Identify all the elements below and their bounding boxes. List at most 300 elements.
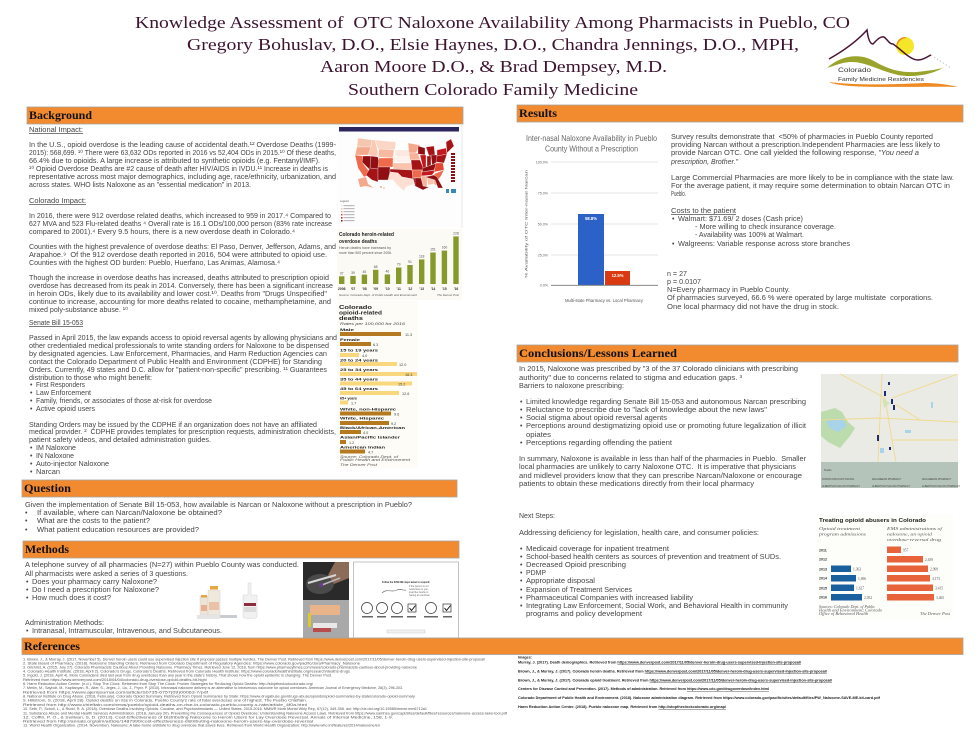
panel: question xyxy=(22,480,457,534)
chart: Colorado heroin-related overdose deaths: more than 500 percent since 2006. xyxy=(339,251,392,255)
chart: Colorado opioid-related deaths: 15 to 19 years xyxy=(340,348,378,352)
text block: reference list: 12. Coffin, P. O., & Sullivan, S. D. (2013). Cost-Effectiveness of Distributing Naloxone to Heroin Users for Lay Overdose Reversal. Annals of Internal Medicine, 158, 1-9. xyxy=(23,716,393,720)
chart: intra-nasal naloxone availability bar chart: 25.0% xyxy=(538,254,549,258)
text block: study question xyxy=(25,502,412,534)
text block: image references: Murray, J. (2017). Death demographics. Retrieved from https://www.denverpost.com/2017/11/05/denver-heroin-drug-users-supervised-injection-site-proposal/ xyxy=(518,660,801,664)
chart: Colorado opioid-related deaths: 12.6 xyxy=(402,392,409,396)
text block: Colorado impact: continue to increase, accounting for more deaths related to cocaine, methamphetamine, and xyxy=(29,299,331,306)
text block: next steps: programs and policy development xyxy=(526,611,642,618)
heading: Results: Results xyxy=(519,106,557,120)
chart: intra-nasal naloxone availability bar chart: 50.0% xyxy=(538,222,549,226)
text block: study question: What are the costs to the patient? xyxy=(37,518,150,525)
image: Pueblo naloxone map: ALBERTSON SAV-ON PHARMACY xyxy=(872,485,911,488)
text block: survey results: Survey results demonstrate that <50% of pharmacies in Pueblo County reported xyxy=(671,134,933,141)
chart: Colorado opioid-related deaths: 65+ years xyxy=(340,396,357,400)
image: naloxone syringe in hand xyxy=(303,562,349,600)
text block: next steps: Pharmaceutical Companies with increased liability xyxy=(526,595,694,602)
chart: Colorado heroin-related overdose deaths: 45 xyxy=(363,270,366,274)
title block: Aaron Moore D.O., & Brad Dempsey, M.D. xyxy=(320,57,667,76)
text block: Senate Bill 15-053: • xyxy=(30,445,33,452)
text block: national impact: representative across most major demographics, including age, race/ethnicity, urbanization, and xyxy=(29,174,336,181)
chart: Colorado heroin-related overdose deaths: '08 xyxy=(362,287,367,291)
text block: costs to the patient: Walmart: $71.69/ 2 doses (Cash price) xyxy=(678,216,803,223)
text block: barriers to prescribing: Reluctance to prescribe due to "lack of knowledge about the new laws" xyxy=(526,407,768,414)
text block: survey results: providing Narcan without a prescription.Independent Pharmacies are less likely to xyxy=(671,142,940,149)
text block: sample statistics: N=Every pharmacy in Pueblo County. xyxy=(667,287,790,294)
text block: reference list: 13. World Health Organization. (2014, November). Naloxone: A take-home antidote to drug overdose that saves lives. Retrieved from World Health Organization: http://www.who.int/features/2014/naloxone/en xyxy=(23,724,380,728)
text block: study question: What patient education resources are provided? xyxy=(37,527,199,534)
heading: References: References xyxy=(24,639,80,653)
chart: treating opioid abusers in Colorado: Sources: Colorado Dept. of Public xyxy=(819,605,875,609)
diagram: SAVE ME steps: If the person is not xyxy=(409,585,429,588)
chart: Colorado heroin-related overdose deaths: '11 xyxy=(397,287,401,291)
text block: reference list: 8. National Institute on Drug Abuse. (2018, February). Colorado Opioid Summary. Retrieved from Opioid Summaries by State: https://www.drugabuse.gov/drugs-abuse/opioids/opioid-summaries-by-state/colorado-opioid-summary xyxy=(23,694,415,698)
text block: reference list: 9. Hillstrom, S. (2018, April 28). Opioid deaths on rise in Colorado, Pueblo County's rate of fatal overdoses one of highest. The Pueblo Chieftain. xyxy=(23,698,307,702)
text block: next steps: Expansion of Treatment Services xyxy=(526,587,633,594)
text block: Senate Bill 15-053: • xyxy=(30,390,33,397)
logo: Colorado Family Medicine Residencies: Colorado xyxy=(838,68,872,74)
text block: national impact: 2015): 568,699. ¹⁰ There were 63,632 ODs reported in 2016 vs 52,404 ODs in 2015.¹⁰ Of these deaths, xyxy=(29,149,336,157)
text block: study question: If available, where can Narcan/Naloxone be obtained? xyxy=(37,510,222,517)
text block: image references: Brown, J., & Murray, J. (2017). Colorado heroin deaths. Retrieved from https://www.denverpost.com/2017/11/05/denver-heroin-drug-users-supervised-injection-site-proposal/ xyxy=(518,670,827,674)
text block: Senate Bill 15-053: Passed in April 2015, the law expands access to opioid reversal agents by allowing physicians and xyxy=(29,335,337,342)
text block: Senate Bill 15-053: Active opioid users xyxy=(36,406,95,413)
image: Pueblo naloxone map xyxy=(821,374,961,488)
text block: image references: Centers for Disease Control and Prevention. (2017). Methods of administration. Retrieved from https://www.cdc.gov/drugoverdose/index.html xyxy=(518,687,769,691)
text block: costs to the patient: Walgreens: Variable response across store branches xyxy=(678,241,851,248)
text block: national impact: In the U.S., opioid overdose is the leading cause of accidental death.¹² Overdose Deaths (1999- xyxy=(29,142,337,149)
text block: barriers to prescribing: • xyxy=(520,440,523,447)
chart: treating opioid abusers in Colorado: 1,627 xyxy=(856,586,864,592)
text block: Senate Bill 15-053: patient safety videos, and detailed administration guides. xyxy=(29,437,211,444)
heading: Methods: Methods xyxy=(25,542,69,556)
heading: Conclusions/Lessons Learned: Conclusions/Lessons Learned xyxy=(519,346,677,360)
chart: treating opioid abusers in Colorado: 3,465 xyxy=(936,596,944,601)
chart: Colorado heroin-related overdose deaths: overdose deaths xyxy=(339,239,377,245)
chart: treating opioid abusers in Colorado: 3,173 xyxy=(932,577,940,582)
text block: reference list: 4. Colorado Health Institute. (2018, April 2). Colorado's Drugs. Colorado's Deaths. Retrieved from Colorado Health Institute: https://www.coloradohealthinstitute.org/research/deaths-drugs xyxy=(23,670,350,674)
text block: Colorado impact: in heroin ODs, likely due to its availability and lower cost.¹⁰. Deaths from "Drugs Unspecified" xyxy=(29,290,328,298)
text block: barriers to prescribing: In 2015, Naloxone was prescribed by "3 of the 37 Colorado clinicians with prescribing xyxy=(519,366,798,373)
chart: treating opioid abusers in Colorado xyxy=(817,515,953,620)
chart: treating opioid abusers in Colorado: 2,052 xyxy=(864,596,872,601)
text block: next steps: Appropriate disposal xyxy=(526,578,595,585)
text block: next steps: • xyxy=(520,595,523,602)
chart: Colorado heroin-related overdose deaths xyxy=(337,229,462,300)
text block: Senate Bill 15-053: Family, friends, or associates of those at-risk for overdose xyxy=(36,398,212,405)
chart: Colorado heroin-related overdose deaths: Heroin deaths have increased by xyxy=(339,246,391,250)
chart: Colorado heroin-related overdose deaths: 37 xyxy=(340,272,344,276)
chart: treating opioid abusers in Colorado: 3,415 xyxy=(935,586,943,592)
text block: next steps: • xyxy=(520,587,523,594)
text block: national impact xyxy=(29,127,337,189)
image: naloxone kit xyxy=(303,600,349,638)
heading: Question: Question xyxy=(24,481,71,495)
text block: Senate Bill 15-053: by designated agencies. Law Enforcement, Pharmacies, and Harm Reduction Agencies can xyxy=(29,351,327,358)
image: Pueblo naloxone map: Pueblo xyxy=(824,469,832,472)
panel: background xyxy=(27,107,463,476)
chart: treating opioid abusers in Colorado: EMS administrations of xyxy=(885,527,944,531)
chart: Colorado heroin-related overdose deaths: 118 xyxy=(419,254,425,258)
text block: reference list: Retrieved from https://www.ajemjournal.com/article/S0735-6757(09)00063-7/pdf xyxy=(23,690,209,694)
text block: Senate Bill 15-053: Law Enforcement xyxy=(36,390,91,397)
chart: treating opioid abusers in Colorado: 2016 xyxy=(819,596,827,600)
image: Pueblo naloxone map: WALGREENS PHARMACY xyxy=(872,478,902,481)
text block: next steps: Next Steps: xyxy=(519,513,555,520)
text block: Senate Bill 15-053: Senate Bill 15-053 xyxy=(29,320,83,327)
text block: Senate Bill 15-053: Auto-injector Naloxone xyxy=(36,461,109,468)
text block: next steps: Integrating Law Enforcement, Social Work, and Behavioral Health in community xyxy=(526,603,789,610)
text block: Colorado impact: 627 MVA and 523 Flu-related deaths ⁴ Overall rate is 16.1 ODs/100,000 person (83% rate increase xyxy=(29,221,332,228)
text block: survey methods: Does your pharmacy carry Naloxone? xyxy=(32,579,157,586)
text block: Senate Bill 15-053: other credentialed medical professionals to write standing orders for Naloxone to be dispensed xyxy=(29,343,329,350)
chart: Colorado opioid-related deaths: 1.7 xyxy=(351,402,356,406)
chart: treating opioid abusers in Colorado: program admissions xyxy=(817,532,867,536)
text block: study question: Given the implementation of Senate Bill 15-053, how available is Narcan or Naloxone without a prescription in Pueblo? xyxy=(25,502,412,509)
text block: study question: • xyxy=(25,518,28,525)
chart: Colorado heroin-related overdose deaths: '15 xyxy=(442,287,447,291)
text block: reference list: 10. Seth, P., Scholl, L., & Rudd, R. A. (2018). Overdose Deaths Involving Opioids, Cocaine, and Psychostimulants — United States, 2015-2016. MMWR Morb Mortal Wkly Rep, 67(12), 349-358. doi: http://dx.doi.org/10.15585/mmwr.mm6712a1 xyxy=(23,707,427,711)
chart: Colorado opioid-related deaths: Source: Colorado Dept. of xyxy=(340,455,400,459)
heading: Results xyxy=(517,105,963,122)
text block: image references: Colorado Department of Public Health and Environment. (2018). Naloxone administration diagram. Retrieved from https://www.colorado.gov/pacific/sites/default/files/PW_Naloxone-SAVE-ME-kit-card.pdf xyxy=(518,696,881,700)
heading: Background xyxy=(27,107,463,124)
chart: Colorado opioid-related deaths: White, non-Hispanic xyxy=(340,408,396,412)
chart: intra-nasal naloxone availability bar chart xyxy=(524,133,658,303)
chart: Colorado opioid-related deaths: 9.6 xyxy=(394,412,399,416)
text block: sample statistics: p = 0.0107 xyxy=(667,279,701,286)
text block: barriers to prescribing: authority" due to concerns related to stigma and education gaps. ³ xyxy=(519,375,743,382)
text block: Colorado impact: In 2016, there were 912 overdose related deaths, which increased to 959 in 2017.⁴ Compared to xyxy=(29,213,331,220)
text block: Senate Bill 15-053: distribution to those who might benefit: xyxy=(29,375,152,382)
chart: Colorado opioid-related deaths: 25 to 34 years xyxy=(340,368,378,372)
chart: Colorado heroin-related overdose deaths: 91 xyxy=(408,260,412,264)
chart: intra-nasal naloxone availability bar chart: County Without a Prescription xyxy=(545,144,638,154)
text block: sample statistics: One local pharmacy did not have the drug in stock. xyxy=(667,304,839,311)
chart: Colorado heroin-related overdose deaths: 160 xyxy=(442,246,447,250)
text block: national impact: ¹⁰ Opioid Overdose Deaths are #2 cause of death after HIV/AIDS in IVDU.¹¹ Increase in deaths is xyxy=(29,165,328,173)
text block: sample statistics: n = 27 xyxy=(667,271,687,278)
chart: Colorado opioid-related deaths: Asian/Pacific Islander xyxy=(340,436,401,440)
diagram: SAVE ME steps: treat like he/she is xyxy=(409,591,429,594)
text block: Senate Bill 15-053: • xyxy=(30,398,33,405)
image: naloxone vials and nasal device xyxy=(197,583,257,619)
chart: US overdose death rate map: Legend xyxy=(340,199,349,203)
text block: Colorado impact: Though the increase in overdose deaths has increased, deaths attributed to prescription opioid xyxy=(29,275,329,282)
chart: Colorado opioid-related deaths: The Denver Post xyxy=(340,463,377,467)
text block: survey methods: A telephone survey of all pharmacies (N=27) within Pueblo County was conducted. xyxy=(25,562,299,569)
text block: Senate Bill 15-053: • xyxy=(30,406,33,413)
text block: Senate Bill 15-053: IM Naloxone xyxy=(36,445,76,452)
text block: Colorado impact: Colorado Impact: xyxy=(29,198,86,205)
text block: reference list: Retrieved from http://annals.org/aim/article/1487990/cost-effectiveness-distributing-naloxone-heroin-users-lay-overdose-reversal xyxy=(23,720,313,724)
chart: Colorado heroin-related overdose deaths: '14 xyxy=(431,287,435,291)
chart: Colorado heroin-related overdose deaths: '13 xyxy=(419,287,424,291)
text block: Senate Bill 15-053: Standing Orders may be issued by the CDPHE if an organization does not have an affiliated xyxy=(29,422,317,429)
text block: survey methods: Do I need a prescription for Naloxone? xyxy=(32,587,159,594)
text block: barriers to prescribing: opiates xyxy=(526,432,552,439)
logo: Colorado Family Medicine Residencies xyxy=(827,30,958,87)
chart: Colorado opioid-related deaths: deaths xyxy=(339,316,363,322)
title block: Knowledge Assessment of OTC Naloxone Availability Among Pharmacists in Pueblo, CO xyxy=(135,13,850,32)
title block: Gregory Bohuslav, D.O., Elsie Haynes, D.O., Chandra Jennings, D.O., MPH, xyxy=(187,35,799,54)
chart: Colorado heroin-related overdose deaths: 79 xyxy=(397,262,401,266)
text block: summary: and midlevel providers know that they can prescribe Narcan/Naloxone or encourage xyxy=(519,473,802,480)
text block: Senate Bill 15-053: • xyxy=(30,453,33,460)
chart: Colorado heroin-related overdose deaths: '09 xyxy=(373,287,378,291)
chart: Colorado opioid-related deaths: opioid-related xyxy=(339,310,382,316)
chart: Colorado heroin-related overdose deaths: Colorado heroin-related xyxy=(339,232,395,238)
text block: survey methods: Intranasal, Intramuscular, Intravenous, and Subcutaneous. xyxy=(32,628,222,635)
text block: survey methods: • xyxy=(26,628,29,635)
text block: Colorado impact: overdose has decreased from its peak in 2014. Conversely, there has been a significant increase xyxy=(29,283,333,290)
image: Pueblo naloxone map: ALBERTSON SAV-ON PHARMACY xyxy=(822,485,861,488)
chart: Colorado opioid-related deaths: 20 to 24 years xyxy=(340,358,378,362)
panel: conclusions xyxy=(517,345,961,620)
text block: survey results: prescription, Brother." xyxy=(670,159,739,166)
image: Pueblo naloxone map: DOWN'S DISCOUNT DRUGS xyxy=(822,478,854,481)
text block: barriers to prescribing xyxy=(519,366,806,447)
chart: Colorado opioid-related deaths xyxy=(337,301,418,468)
diagram: SAVE ME steps: having an overdose xyxy=(409,594,431,597)
text block: next steps: • xyxy=(520,562,523,569)
text block: survey methods: • xyxy=(26,587,29,594)
text block: survey methods: • xyxy=(26,595,29,602)
chart: Colorado heroin-related overdose deaths: '16 xyxy=(454,287,458,291)
text block: Colorado impact: mixed poly-substance abuse. ¹⁰ xyxy=(29,306,128,314)
text block: survey methods: • xyxy=(26,579,29,586)
chart: Colorado opioid-related deaths: White, Hispanic xyxy=(340,416,384,420)
text block: barriers to prescribing: • xyxy=(520,407,523,414)
text block: reference list: Retrieved from http://www.chieftain.com/news/pueblo/opioid-deaths-on-rise-in-colorado-pueblo-county-s-rate/article_4f0a.html xyxy=(23,703,307,707)
chart: Colorado opioid-related deaths: 6.3 xyxy=(373,343,378,347)
diagram: SAVE ME steps: Follow the SAVE ME steps below to respond: xyxy=(382,580,430,584)
text block: summary: In summary, Naloxone is available in less than half of the pharmacies in Pueblo. Smaller xyxy=(519,456,807,463)
chart: Colorado heroin-related overdose deaths: 68 xyxy=(374,265,378,269)
heading: Background: Background xyxy=(29,108,92,122)
chart: Colorado heroin-related overdose deaths: '07 xyxy=(351,287,355,291)
text block: costs to the patient: • xyxy=(672,241,675,248)
chart: Colorado opioid-related deaths: 16.3 xyxy=(405,373,412,377)
text block: barriers to prescribing: Limited knowledge regarding Senate Bill 15-053 and autonomous Narcan prescribing xyxy=(526,399,806,406)
text block: Colorado impact xyxy=(29,198,336,314)
text block: survey methods xyxy=(25,562,299,635)
chart: Colorado opioid-related deaths: 15.2 xyxy=(398,382,405,386)
text block: Senate Bill 15-053: contact the Colorado Department of Public Health and Environment (CDPHE) for Standing xyxy=(29,359,322,366)
text block: survey methods: All pharmacists were asked a series of 3 questions. xyxy=(25,571,188,578)
text block: national impact: National Impact: xyxy=(29,127,83,134)
chart: intra-nasal naloxone availability bar chart: % Availability of OTC Inter-nasal Narcan xyxy=(524,170,528,278)
text block: image references: Brown, J., & Murray, J. (2017). Colorado opioid treatment. Retrieved from https://www.denverpost.com/2017/11/05/denver-heroin-drug-users-supervised-injection-site-proposal/ xyxy=(518,678,832,682)
chart: Colorado opioid-related deaths: 45 to 64 years xyxy=(340,387,378,391)
chart: Colorado opioid-related deaths: American Indian xyxy=(340,446,386,450)
text block: survey methods: How much does it cost? xyxy=(32,595,111,602)
chart: treating opioid abusers in Colorado: 2,999 xyxy=(930,568,938,572)
text block: summary: patients to obtain these medications directly from their local pharmacy xyxy=(519,481,755,488)
chart: treating opioid abusers in Colorado: Opioid treatment xyxy=(819,527,862,531)
text block: image references xyxy=(518,656,881,709)
text block: costs to the patient: - Availability was 100% at Walmart. xyxy=(695,232,804,239)
heading: Methods xyxy=(23,541,459,558)
chart: US overdose death rate map xyxy=(337,125,462,228)
text block: next steps: • xyxy=(520,570,523,577)
text block: reference list: 5. Ingold, J. (2018, April 4). More Coloradans died last year from drug overdoses than any year in the state's history. That shows how the opioid epidemic is changing. The Denver Post. xyxy=(23,674,332,678)
text block: reference list: Retrieved from https://www.denverpost.com/2018/04/04/colorado-drug-overdose-opioid-deaths-hit-high/ xyxy=(23,678,208,682)
heading: Conclusions/Lessons Learned xyxy=(517,345,958,362)
chart: treating opioid abusers in Colorado: 2,639 xyxy=(925,558,933,563)
chart: intra-nasal naloxone availability bar chart: Multi-state Pharmacy vs. Local Pharmacy xyxy=(565,298,644,303)
chart: intra-nasal naloxone availability bar chart: 0.0% xyxy=(540,284,549,288)
text block: barriers to prescribing: • xyxy=(520,399,523,406)
chart: intra-nasal naloxone availability bar chart: 75.0% xyxy=(538,192,549,196)
chart: intra-nasal naloxone availability bar chart: 100.0% xyxy=(536,160,549,164)
chart: Colorado heroin-related overdose deaths: Source: Colorado Dept. of Public Health and Environment xyxy=(339,293,417,297)
chart: Colorado heroin-related overdose deaths: 39 xyxy=(351,271,355,275)
text block: survey results: Pueblo. xyxy=(671,191,686,198)
text block: next steps: Decreased Opioid prescribing xyxy=(526,562,626,569)
heading: Question xyxy=(22,480,457,497)
text block: next steps: • xyxy=(520,603,523,610)
chart: Colorado opioid-related deaths: Male xyxy=(340,328,354,332)
chart: Colorado opioid-related deaths: 35 to 44 years xyxy=(340,378,378,382)
text block: barriers to prescribing: Social stigma about opioid reversal agents xyxy=(526,415,668,422)
text block: Senate Bill 15-053: • xyxy=(30,382,33,389)
text block: sample statistics xyxy=(667,271,933,311)
text block: next steps xyxy=(519,513,789,618)
text block: study question: • xyxy=(25,527,28,534)
chart: treating opioid abusers in Colorado: 957 xyxy=(903,548,909,552)
diagram: SAVE ME steps: responsive to you, xyxy=(409,588,429,591)
chart: Colorado opioid-related deaths: 9.2 xyxy=(391,422,396,426)
text block: survey results: Large Commercial Pharmacies are more likely to be in compliance with the state law. xyxy=(671,175,954,182)
text block: Senate Bill 15-053: medical provider. ² CDPHE provides templates for prescription requests, administration checklists, xyxy=(29,429,336,436)
chart: Colorado heroin-related overdose deaths: '12 xyxy=(408,287,412,291)
text block: costs to the patient: - More willing to check insurance coverage. xyxy=(695,224,836,231)
chart: Colorado heroin-related overdose deaths: '10 xyxy=(385,287,390,291)
text block: Colorado impact: Arapahoe.⁹ Of the 912 overdose death reported in 2016, 504 were attributed to opioid use. xyxy=(29,252,327,259)
text block: reference list: 11. Substance Abuse and Mental Health Services Administration. (2018, January 20). Preventing the Consequences of Opioid Overdose: Understanding Naloxone Access Laws. Retrieved from https://www.samhsa.gov/capt/sites/default/files/resources/naloxone-access-laws-tool.pdf xyxy=(23,712,508,716)
text block: Colorado impact: Counties with the highest OD burden: Pueblo, Huerfano, Las Animas, Alamosa.⁴ xyxy=(29,260,280,267)
chart: Colorado opioid-related deaths: Black/African-American xyxy=(340,426,406,430)
text block: barriers to prescribing: • xyxy=(520,423,523,430)
text block: summary: local pharmacies are unlikely to carry Naloxone OTC. It is imperative that physicians xyxy=(519,464,797,471)
chart: Colorado heroin-related overdose deaths: The Denver Post xyxy=(437,293,459,297)
chart: Colorado heroin-related overdose deaths: 151 xyxy=(430,248,436,252)
title block: Southern Colorado Family Medicine xyxy=(348,80,638,99)
text block: sample statistics: Of pharmacies surveyed, 66.6 % were operated by large multistate corporations. xyxy=(667,295,933,302)
text block: next steps: Addressing deficiency for legislation, health care, and consumer policies: xyxy=(519,530,759,537)
chart: Colorado opioid-related deaths: 4.7 xyxy=(368,450,373,454)
text block: costs to the patient: • xyxy=(672,216,675,223)
text block: image references: Harm Reduction Action Center. (2018). Pueblo naloxone map. Retrieved from http://stoptheclockcolorado.org/map/ xyxy=(518,705,726,709)
chart: Colorado heroin-related overdose deaths: 46 xyxy=(386,270,389,274)
text block: Colorado impact: Counties with the highest prevalence of overdose deaths: El Paso, Denver, Jefferson, Adams, and xyxy=(29,244,336,251)
text block: reference list: 2. State Board of Pharmacy. (2018). Naloxone Standing Orders. Retrieved from Colorado Department of Regulatory Agencies: https://www.colorado.gov/pacific/dora/Pharmacy_Naloxone xyxy=(23,662,360,666)
text block: reference list: 1. Brown, J., & Murray, J. (2017, November 5). Denver heroin users could use supervised injection site if proposal passes multiple hurdles. The Denver Post. Retrieved from https://www.denverpost.com/2017/11/05/denver-heroin-drug-users-supervised-injection-site-proposal/ xyxy=(23,658,486,662)
diagram: SAVE ME steps xyxy=(354,562,458,638)
chart: Colorado heroin-related overdose deaths: 228 xyxy=(453,232,459,236)
chart: Colorado opioid-related deaths: 11.3 xyxy=(405,333,412,337)
text block: image references: Images: xyxy=(518,656,532,660)
text block: next steps: PDMP xyxy=(526,570,546,577)
text block: next steps: School-based health centers as sources of prevention and treatment of SUDs. xyxy=(526,554,781,561)
text block: survey results xyxy=(670,134,954,198)
chart: treating opioid abusers in Colorado: 1,363 xyxy=(853,568,861,572)
chart: treating opioid abusers in Colorado: 2015 xyxy=(819,586,827,590)
text block: reference list: 7. Merlin, M., Saybolt, M., Kapitanyan, R., Alter, S., Jeges, J., Liu, J., Pryor, P. (2010). Intranasal naloxone delivery is an alternative to intravenous naloxone for opioid overdoses. American Journal of Emergency Medicine, 28(3), 296-303. xyxy=(23,686,403,690)
text block: reference list xyxy=(23,658,508,728)
chart: treating opioid abusers in Colorado: 1,696 xyxy=(858,577,866,582)
text block: Senate Bill 15-053: Narcan xyxy=(36,469,60,476)
text block: reference list: 3. Gilchrist, A. (2015, July 27). Colorado Pharmacists Cautious About Providing Naloxone. Pharmacy Times. Retrieved June 12, 2018, from https://www.pharmacytimes.com/news/colorado-pharmacists-cautious-about-providing-naloxone xyxy=(23,666,417,670)
text block: Senate Bill 15-053: • xyxy=(30,469,33,476)
text block: next steps: Medicaid coverage for inpatient treatment xyxy=(526,546,669,553)
chart: intra-nasal naloxone availability bar chart: 12.5% xyxy=(612,273,624,278)
image: Pueblo naloxone map: WALGREENS PHARMACY xyxy=(922,478,952,481)
title block xyxy=(135,13,850,99)
chart: intra-nasal naloxone availability bar chart: Inter-nasal Naloxone Availability in Pueblo xyxy=(526,133,657,143)
chart: Colorado heroin-related overdose deaths: 2006 xyxy=(338,287,346,291)
text block: study question: • xyxy=(25,510,28,517)
chart: treating opioid abusers in Colorado: Office of Behavioral Health xyxy=(819,612,868,616)
chart: treating opioid abusers in Colorado: 2013 xyxy=(819,568,827,572)
panel: references xyxy=(22,638,963,728)
text block: summary xyxy=(519,456,807,488)
chart: treating opioid abusers in Colorado: Health and Environment; Colorado xyxy=(818,608,882,612)
text block: next steps: • xyxy=(520,578,523,585)
chart: Colorado opioid-related deaths: 12.0 xyxy=(399,363,406,367)
panel: methods xyxy=(23,541,459,638)
chart: Colorado opioid-related deaths: Rates per 100,000 for 2016 xyxy=(340,322,406,326)
chart: treating opioid abusers in Colorado: The Denver Post xyxy=(920,612,951,616)
heading: References xyxy=(22,638,963,654)
text block: next steps: • xyxy=(520,554,523,561)
chart: Colorado opioid-related deaths: 1.2 xyxy=(349,441,354,445)
chart: Colorado opioid-related deaths: 4.0 xyxy=(362,354,367,358)
text block: Senate Bill 15-053 xyxy=(29,320,337,476)
text block: Senate Bill 15-053: First Responders xyxy=(36,382,85,389)
text block: survey results: provide Narcan OTC. One call yielded the following response, "You need a xyxy=(671,150,919,157)
text block: reference list: 6. Harm Reduction Action Center. (n.d.). Stop The Clock. Retrieved from Stop The Clock: Proven Strategies for Reducing Opioid Deaths: http://stoptheclockcolorado.org/ xyxy=(23,682,314,686)
panel: results xyxy=(517,105,963,311)
text block: Senate Bill 15-053: • xyxy=(30,461,33,468)
text block: next steps: • xyxy=(520,546,523,553)
chart: treating opioid abusers in Colorado: naloxone, an opioid xyxy=(887,532,932,538)
text block: survey methods: Administration Methods: xyxy=(25,620,104,627)
chart: treating opioid abusers in Colorado: 2012 xyxy=(819,558,827,562)
text block: costs to the patient: Costs to the patient xyxy=(671,208,736,215)
chart: treating opioid abusers in Colorado: 2014 xyxy=(819,576,827,580)
image: Pueblo naloxone map: ALBERTSON SAV-ON PHARMACY xyxy=(922,485,961,488)
text block: barriers to prescribing: • xyxy=(520,415,523,422)
chart: treating opioid abusers in Colorado: Treating opioid abusers in Colorado xyxy=(819,518,927,524)
text block: survey results: For the average patient, it may require some determination to obtain Narcan OTC in xyxy=(671,183,950,190)
text block: costs to the patient xyxy=(671,208,851,248)
chart: Colorado opioid-related deaths: 4.0 xyxy=(363,431,368,435)
text block: Senate Bill 15-053: Orders. Currently, 49 states and D.C. allow for "patient-non-specific" prescribing. ¹¹ Guarantees xyxy=(29,367,327,374)
text block: Senate Bill 15-053: IN Naloxone xyxy=(36,453,74,460)
text block: barriers to prescribing: Barriers to naloxone prescribing: xyxy=(519,383,624,390)
text block: barriers to prescribing: Perceptions regarding offending the patient xyxy=(526,440,672,447)
text block: national impact: across states. WHO lists Naloxone as an "essential medication" in 2013. xyxy=(29,182,251,189)
chart: Colorado opioid-related deaths: Female xyxy=(340,338,360,342)
text block: Colorado impact: compared to 2001).⁴ Every 9.5 hours, there is a new overdose death in Colorado.⁴ xyxy=(29,229,295,236)
chart: treating opioid abusers in Colorado: overdose-reversal drug xyxy=(887,538,941,542)
chart: treating opioid abusers in Colorado: 2011 xyxy=(819,548,827,552)
logo: Colorado Family Medicine Residencies: Family Medicine Residencies xyxy=(838,77,924,83)
chart: intra-nasal naloxone availability bar chart: 58.8% xyxy=(585,216,597,221)
chart: Colorado opioid-related deaths: Colorado xyxy=(339,305,372,311)
